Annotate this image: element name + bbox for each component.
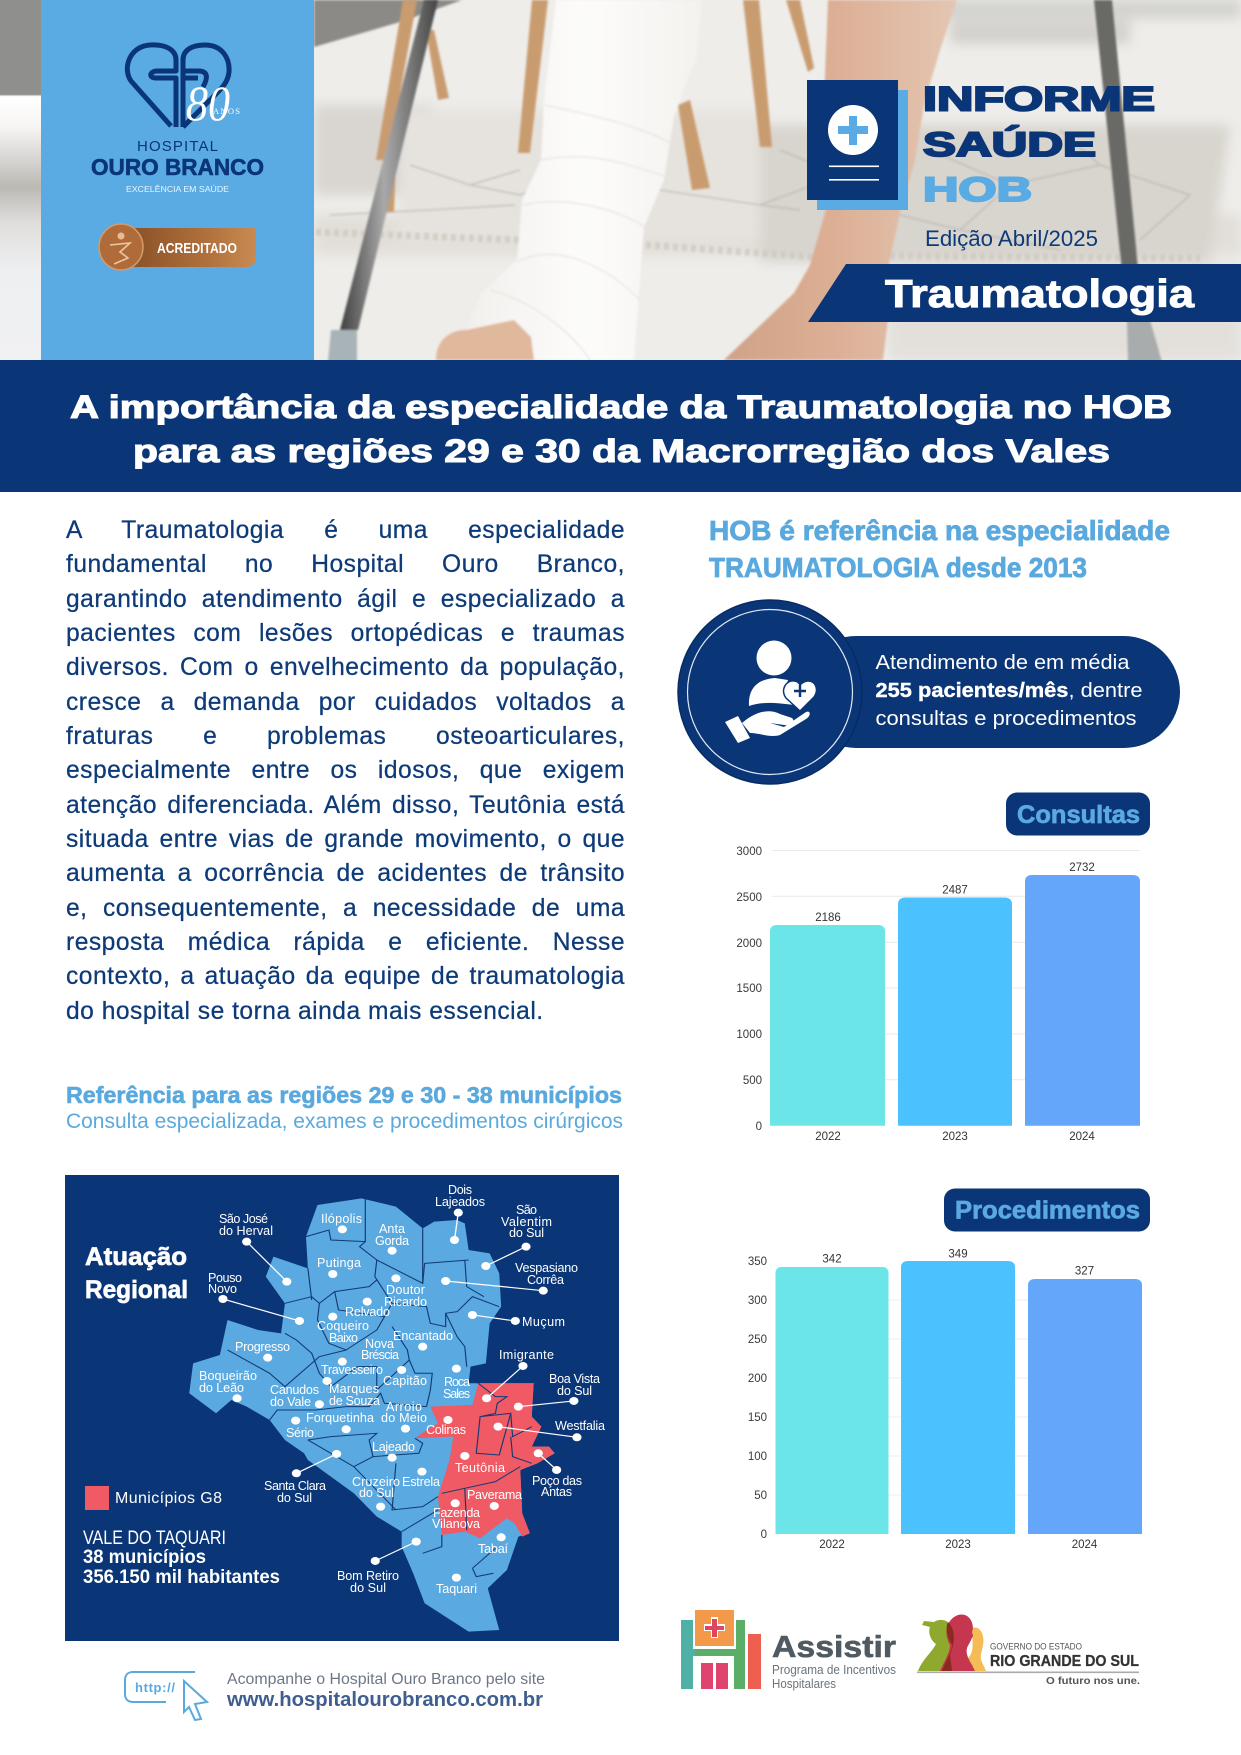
bar: 2023: 2487: [942, 884, 968, 896]
municipality labels: do Sul: [509, 1226, 544, 1240]
heading: atuacao regional: Regional: [85, 1276, 188, 1304]
bar: 2024: [1028, 1266, 1142, 1551]
bar: 2022: 342: [822, 1254, 842, 1266]
legend: municipios g8: Municípios G8: [115, 1490, 222, 1507]
bar chart: procedimentos: [748, 1249, 1142, 1551]
municipality labels: São: [516, 1203, 537, 1217]
logo text: hospital: HOSPITAL: [137, 138, 218, 155]
logo: governo do rio grande do sul: GOVERNO DO ESTADO: [990, 1642, 1082, 1652]
municipality labels: Boa Vista: [549, 1372, 600, 1386]
bar: 2024: [1025, 862, 1140, 1143]
chair legs: [376, 0, 814, 212]
bar: 2024: 2024: [1069, 1131, 1095, 1143]
bar chart: procedimentos: 250: [748, 1334, 767, 1346]
title band: [0, 360, 1241, 492]
header photo: leg in a cast with crutches: [0, 0, 1241, 362]
body text: pacientes com lesões ortopédicas e traumas: [66, 620, 625, 647]
right column heading: HOB é referência na especialidade: [709, 515, 1170, 546]
80 anos mark: 80: [186, 75, 230, 131]
edition date: Edição Abril/2025: [925, 226, 1098, 251]
bar: 2024: 2732: [1069, 862, 1095, 874]
toes: [436, 320, 534, 360]
municipality labels: [199, 1183, 605, 1596]
body text: fundamental no Hospital Ouro Branco,: [66, 551, 625, 578]
bar chart: consultas: 1500: [736, 983, 762, 995]
logo: governo do rio grande do sul: O futuro nos une.: [1046, 1676, 1140, 1687]
municipality labels: Imigrante: [499, 1348, 554, 1362]
municipality labels: Doutor: [386, 1283, 425, 1297]
logo: assistir: Programa de Incentivos: [772, 1663, 896, 1677]
municipality labels: Taquari: [436, 1582, 477, 1596]
body text: atenção diferenciada. Além disso, Teutônia está: [66, 792, 625, 819]
crutches: [340, 0, 438, 330]
municipality labels: Relvado: [345, 1305, 390, 1319]
referencia subheading: [66, 1082, 623, 1133]
body text: fraturas e problemas osteoarticulares,: [66, 723, 625, 750]
municipality labels: do Sul: [359, 1486, 394, 1500]
bar chart: consultas: [736, 846, 1140, 1143]
icon: http cursor: [125, 1672, 207, 1720]
municipality labels: Roca: [444, 1375, 470, 1389]
publication title: HOB: [923, 171, 1032, 209]
body text: cresce a demanda por cuidados voltados a: [66, 689, 625, 716]
municipality labels: Vespasiano: [515, 1261, 578, 1275]
municipality labels: Antas: [541, 1485, 572, 1499]
municipality labels: Lajeado: [372, 1440, 415, 1454]
municipality labels: Cruzeiro: [352, 1475, 400, 1489]
second leg: [724, 0, 957, 360]
municipality labels: Boqueirão: [199, 1369, 257, 1383]
body text: A Traumatologia é uma especialidade: [66, 517, 625, 544]
referencia subheading: Consulta especializada, exames e procedimentos cirúrgicos: [66, 1110, 623, 1133]
municipality labels: Arroio: [386, 1400, 422, 1414]
municipality labels: do Herval: [219, 1224, 273, 1238]
callout: patients per month: consultas e procedimentos: [876, 707, 1136, 730]
municipality labels: Sério: [286, 1426, 314, 1440]
municipality labels: Marques: [329, 1382, 379, 1396]
municipality labels: Fazenda: [433, 1506, 480, 1520]
municipality labels: Colinas: [426, 1423, 466, 1437]
municipality labels: Ilópolis: [321, 1212, 362, 1226]
bar chart: procedimentos: 0: [761, 1529, 767, 1541]
bar chart: consultas: 3000: [736, 846, 762, 858]
municipality labels: Encantado: [393, 1329, 453, 1343]
municipality labels: do Sul: [350, 1581, 386, 1595]
body text: diversos. Com o envelhecimento da população,: [66, 654, 625, 681]
callout lines: [223, 1213, 577, 1561]
bar: 2024: 2024: [1072, 1539, 1098, 1551]
municipality labels: Travesseiro: [321, 1363, 383, 1377]
body text: [66, 517, 625, 1025]
municipality labels: do Leão: [199, 1381, 244, 1395]
heading: atuacao regional: Atuação: [85, 1243, 187, 1271]
municipality labels: Capitão: [383, 1374, 427, 1388]
logo: assistir: Assistir: [772, 1629, 896, 1664]
municipality labels: Coqueiro: [317, 1319, 369, 1333]
title band: A importância da especialidade da Traumatologia no HOB: [70, 389, 1172, 425]
tag: consultas: Consultas: [1017, 801, 1140, 829]
municipality labels: Forquetinha: [306, 1411, 374, 1425]
municipality labels: Bom Retiro: [337, 1569, 399, 1583]
rug fringe: [316, 232, 1200, 258]
body text: aumenta a ocorrência de acidentes de trânsito: [66, 860, 625, 887]
municipality labels: Ricardo: [384, 1295, 427, 1309]
bar chart: procedimentos: 200: [748, 1373, 767, 1385]
footer: website link: [125, 1671, 545, 1720]
municipality labels: Pouso: [208, 1271, 242, 1285]
80 anos mark: ANOS: [213, 106, 240, 116]
right column heading: TRAUMATOLOGIA desde 2013: [709, 552, 1087, 583]
bar: 2023: 2023: [945, 1539, 971, 1551]
municipality dots: [218, 1209, 582, 1582]
bar chart: consultas: 1000: [736, 1029, 762, 1041]
bar chart: procedimentos: 300: [748, 1295, 767, 1307]
municipality labels: Baixo: [329, 1331, 358, 1345]
bar chart: procedimentos: 100: [748, 1451, 767, 1463]
municipality labels: de Souza: [329, 1394, 380, 1408]
municipality labels: Sales: [443, 1387, 470, 1401]
bar chart: consultas: 2000: [736, 938, 762, 950]
municipality labels: do Sul: [557, 1384, 592, 1398]
municipality labels: Gorda: [375, 1234, 409, 1248]
municipality labels: Bréscia: [361, 1348, 399, 1362]
bar: 2023: 349: [948, 1249, 968, 1261]
logo: governo do rio grande do sul: [917, 1615, 1140, 1687]
municipality labels: Santa Clara: [264, 1479, 326, 1493]
bar chart: consultas: 500: [743, 1075, 762, 1087]
body text: resposta médica rápida e eficiente. Nesse: [66, 929, 625, 956]
right column heading: [709, 515, 1170, 583]
tag: procedimentos: [944, 1188, 1150, 1232]
municipality labels: São José: [219, 1212, 268, 1226]
heading: atuacao regional: [85, 1243, 188, 1304]
municipality labels: do Meio: [381, 1411, 427, 1425]
municipality labels: Corrêa: [527, 1273, 564, 1287]
icon: caring hand with patient: [725, 640, 816, 743]
municipality labels: Lajeados: [435, 1195, 485, 1209]
municipality labels: Estrela: [402, 1475, 440, 1489]
municipality labels: Teutônia: [455, 1461, 505, 1475]
body text: situada entre vias de grande movimento, o que: [66, 826, 625, 853]
logo: governo do rio grande do sul: RIO GRANDE DO SUL: [990, 1653, 1139, 1670]
municipality labels: Muçum: [522, 1315, 565, 1329]
callout: patients per month: 255 pacientes/mês , dentre: [876, 679, 1142, 702]
logo: assistir: Hospitalares: [772, 1677, 836, 1691]
title band: para as regiões 29 e 30 da Macrorregião dos Vales: [133, 433, 1110, 469]
bar: 2022: 2022: [815, 1131, 841, 1143]
footer: website link: www.hospitalourobranco.com.br: [226, 1689, 543, 1711]
municipality labels: Westfalia: [555, 1419, 605, 1433]
body text: do hospital se torna ainda mais essencial.: [66, 998, 544, 1025]
body text: e, consequentemente, a necessidade de uma: [66, 895, 625, 922]
section banner: traumatologia: Traumatologia: [885, 273, 1194, 316]
stats: vale do taquari: 38 municípios: [83, 1547, 206, 1568]
body text: garantindo atendimento ágil e especializado a: [66, 586, 625, 613]
bar: 2022: 2186: [815, 912, 841, 924]
panel: hospital logo sidebar: [41, 0, 314, 360]
cast: [492, 0, 680, 360]
municipality labels: Paverama: [467, 1488, 522, 1502]
section banner: traumatologia: [808, 264, 1241, 322]
municipality labels: Canudos: [270, 1383, 319, 1397]
tag: procedimentos: Procedimentos: [955, 1196, 1140, 1224]
bar chart: procedimentos: 350: [748, 1256, 767, 1268]
bar: 2024: 327: [1075, 1266, 1094, 1278]
rug pattern: [330, 130, 1190, 250]
municipality labels: do Sul: [277, 1491, 312, 1505]
body text: contexto, a atuação da equipe de traumatologia: [66, 963, 625, 990]
tag: consultas: [1006, 792, 1150, 836]
legend: municipios g8: [85, 1486, 222, 1510]
logo text: ouro branco: OURO BRANCO: [91, 154, 264, 180]
municipality labels: Poço das: [532, 1474, 582, 1488]
bar: 2023: 2023: [942, 1131, 968, 1143]
municipality labels: Dois: [448, 1183, 472, 1197]
footer: website link: Acompanhe o Hospital Ouro Branco pelo site: [227, 1671, 545, 1688]
panel: regional map: [65, 1175, 619, 1641]
municipality labels: Tabaí: [478, 1542, 508, 1556]
bar chart: procedimentos: 150: [748, 1412, 767, 1424]
referencia subheading: Referência para as regiões 29 e 30 - 38 municípios: [66, 1082, 622, 1108]
municipality labels: Putinga: [317, 1256, 361, 1270]
stats: vale do taquari: 356.150 mil habitantes: [83, 1567, 280, 1588]
municipality labels: do Vale: [270, 1395, 311, 1409]
municipality labels: Nova: [365, 1337, 394, 1351]
map shapes: [189, 1198, 582, 1632]
badge: acreditado: [99, 224, 256, 270]
bar chart: consultas: 0: [756, 1121, 762, 1133]
bar: 2023: [898, 884, 1012, 1143]
icon: informe saude document: [807, 80, 908, 210]
body text: especialmente entre os idosos, que exigem: [66, 757, 625, 784]
stats: vale do taquari: VALE DO TAQUARI: [83, 1528, 226, 1549]
municipality labels: Progresso: [235, 1340, 290, 1354]
bar chart: consultas: 2500: [736, 892, 762, 904]
bar chart: procedimentos: 50: [754, 1490, 767, 1502]
municipality labels: Novo: [208, 1282, 237, 1296]
logo: assistir: [681, 1609, 896, 1691]
bar: 2022: [776, 1254, 888, 1551]
publication title: [923, 80, 1155, 209]
municipality labels: Vilanova: [432, 1517, 480, 1531]
bar: 2023: [901, 1249, 1015, 1551]
bar: 2022: 2022: [819, 1539, 845, 1551]
icon: heart and cross logo: [127, 45, 229, 127]
callout: patients per month: [678, 600, 1180, 784]
icon: http cursor: http://: [135, 1680, 175, 1695]
publication title: INFORME: [923, 80, 1155, 118]
callout: patients per month: Atendimento de em média: [876, 651, 1130, 674]
logo text: tagline: EXCELÊNCIA EM SAÚDE: [126, 184, 229, 194]
municipality labels: Anta: [379, 1222, 405, 1236]
municipality labels: Valentim: [501, 1215, 552, 1229]
bar: 2022: [770, 912, 885, 1143]
publication title: SAÚDE: [923, 126, 1096, 164]
stats: vale do taquari: [83, 1528, 280, 1588]
badge: acreditado: ACREDITADO: [157, 240, 237, 257]
